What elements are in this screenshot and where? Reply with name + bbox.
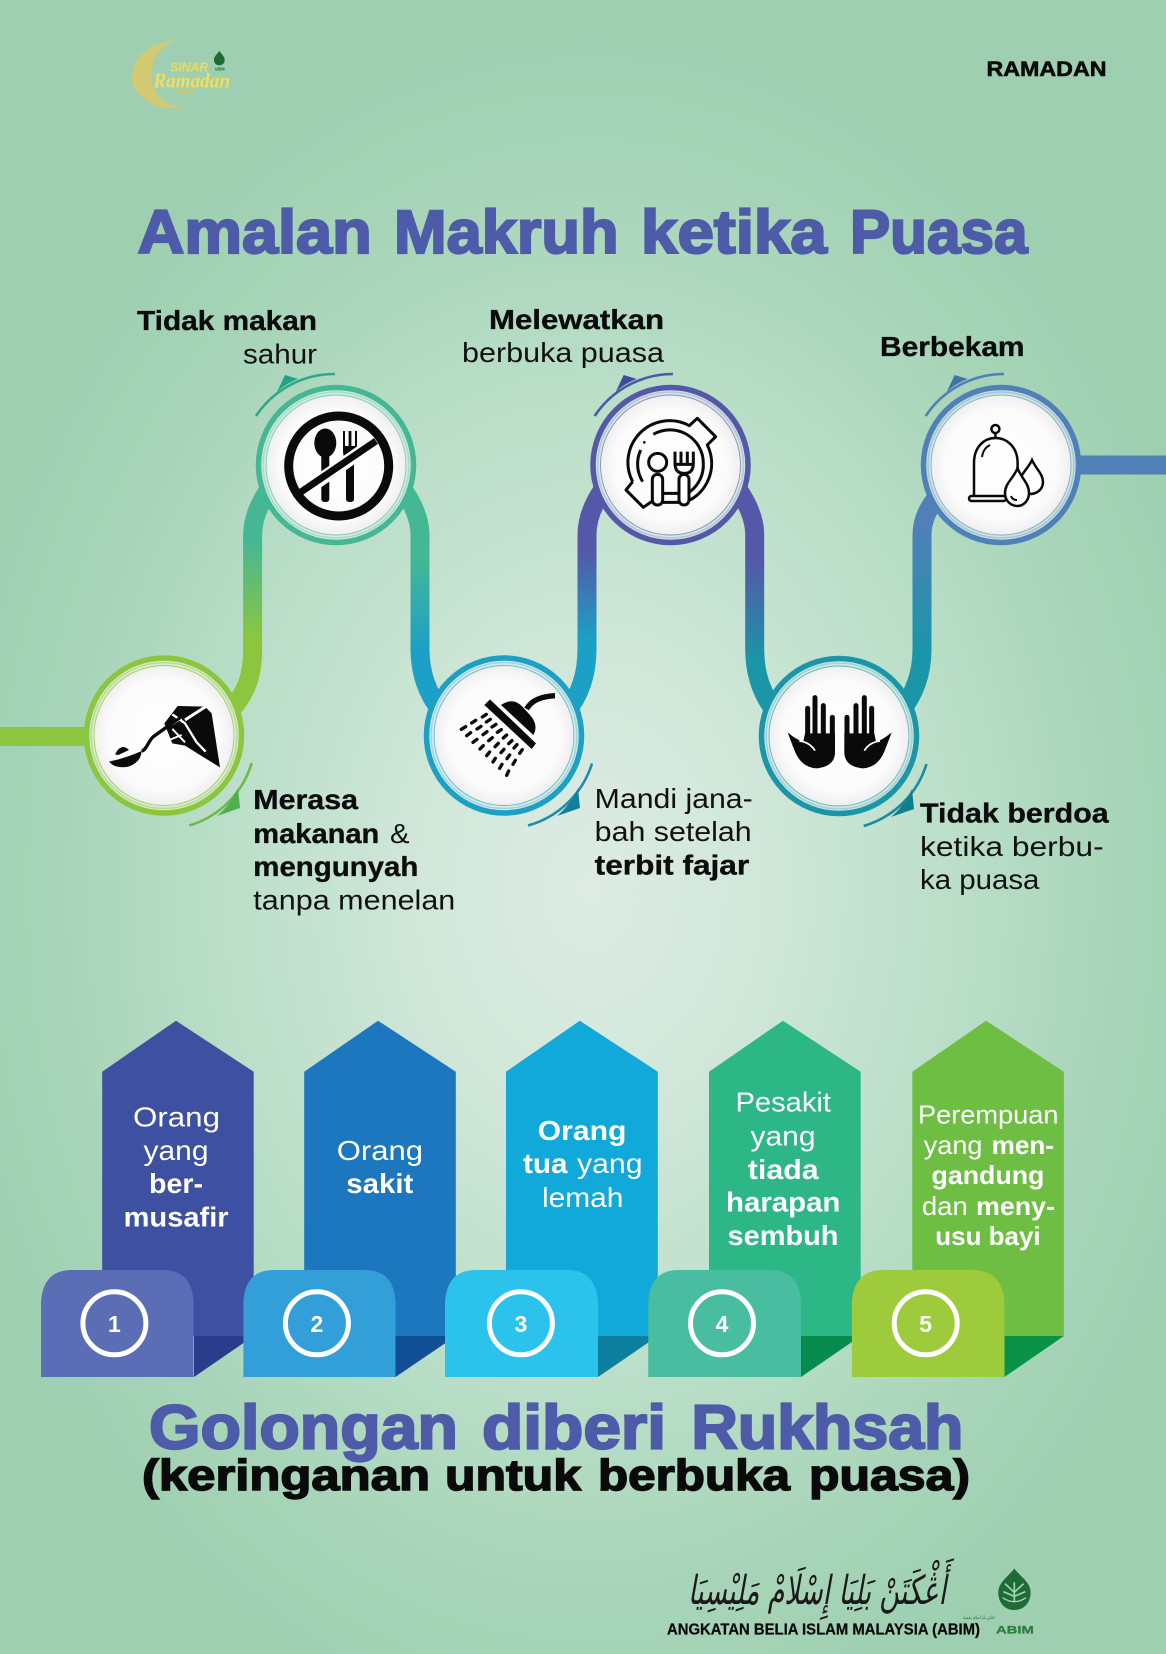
- icon: shower: [461, 696, 555, 775]
- pillar 4: Pesakit yang tiada harapan sembuh: tiada: [748, 1154, 819, 1185]
- pillar 2: Orang sakit: [243, 1021, 456, 1377]
- pillar 4: Pesakit yang tiada harapan sembuh: [648, 1021, 861, 1377]
- footer: ABIM wordmark: ANGKATAN BELIA ISLAM MALAYSIA (ABIM): [667, 1622, 980, 1638]
- pillar 4: Pesakit yang tiada harapan sembuh: yang: [750, 1121, 816, 1152]
- step 6: Berbekam: [924, 374, 1078, 542]
- heading: Golongan diberi Rukhsah: Golongan: [149, 1393, 458, 1462]
- label: Mandi janabah: [595, 783, 753, 880]
- pillar 3: Orang tua yang lemah: lemah: [542, 1182, 623, 1213]
- step 4: Melewatkan berbuka puasa: [593, 374, 748, 542]
- pillar 2: Orang sakit: sakit: [346, 1168, 413, 1199]
- step 2: Tidak makan sahur: [256, 374, 414, 542]
- label: Tidak makan sahur: Tidak makan: [137, 305, 317, 336]
- title: [138, 198, 1029, 266]
- pillar 1: Orang yang bermusafir: ber-: [149, 1168, 203, 1199]
- pillar 5: Perempuan mengandung dan menyusu bayi: Perempuan: [918, 1099, 1058, 1129]
- icon: praying hands: [788, 698, 892, 768]
- logo: Sinar Ramadan crescent: ABIM: [215, 66, 225, 71]
- title: Makruh: [394, 198, 619, 266]
- logo: Sinar Ramadan crescent: SINAR: [170, 60, 209, 75]
- title: Amalan: [138, 198, 372, 266]
- pillar 4: Pesakit yang tiada harapan sembuh: sembuh: [728, 1220, 838, 1251]
- pillar 5: Perempuan mengandung dan menyusu bayi: gandung: [932, 1160, 1044, 1190]
- heading: Golongan diberi Rukhsah: diberi: [482, 1393, 666, 1462]
- label: Tidak berdoa: Tidak berdoa: [920, 798, 1109, 829]
- pillar 3: Orang tua yang lemah: 3: [515, 1311, 527, 1337]
- pillar 1: Orang yang bermusafir: yang: [144, 1135, 208, 1166]
- pillar 2: Orang sakit: Orang: [337, 1135, 423, 1166]
- pillar 4: Pesakit yang tiada harapan sembuh: harapan: [726, 1187, 840, 1218]
- label: Tidak makan sahur: sahur: [243, 338, 317, 370]
- pillar 5: Perempuan mengandung dan menyusu bayi: dan: [922, 1191, 968, 1221]
- subheading: keringanan untuk berbuka puasa: berbuka: [598, 1451, 791, 1500]
- section tag: RAMADAN: RAMADAN: [986, 58, 1106, 81]
- logo: ABIM emblem: ABIM: [996, 1624, 1034, 1636]
- label: Melewatkan berbuka puasa: berbuka puasa: [462, 337, 664, 368]
- label: Tidak berdoa: [920, 798, 1109, 895]
- label: Melewatkan berbuka puasa: [462, 304, 664, 368]
- icon: plate with spoon and fork: [626, 418, 716, 507]
- heading: Golongan diberi Rukhsah: Rukhsah: [691, 1393, 963, 1462]
- label: Merasa makanan dan mengunyah: Merasa: [253, 784, 358, 815]
- pillar 4: Pesakit yang tiada harapan sembuh: 4: [716, 1311, 729, 1337]
- subheading: keringanan untuk berbuka puasa: puasa): [809, 1451, 970, 1500]
- logo: Sinar Ramadan crescent: Ramadan: [152, 70, 230, 92]
- label: Merasa makanan dan mengunyah: mengunyah: [253, 851, 418, 882]
- pillar 1: Orang yang bermusafir: musafir: [124, 1202, 229, 1233]
- label: Merasa makanan dan mengunyah: tanpa menelan: [253, 885, 455, 916]
- pillar 3: Orang tua yang lemah: yang: [577, 1148, 642, 1179]
- title: Puasa: [850, 198, 1029, 266]
- pillar 5: Perempuan mengandung dan menyusu bayi: usu bayi: [935, 1221, 1041, 1251]
- label: Merasa makanan dan mengunyah: &: [390, 818, 410, 849]
- label: Merasa makanan dan mengunyah: makanan: [253, 818, 379, 849]
- step 5: Tidak berdoa: [762, 658, 926, 826]
- pillar 5: Perempuan mengandung dan menyusu bayi: men-: [992, 1130, 1054, 1160]
- pillar 3: Orang tua yang lemah: tua: [523, 1148, 568, 1179]
- pillar 1: Orang yang bermusafir: [41, 1021, 254, 1377]
- pillar 5: Perempuan mengandung dan menyusu bayi: meny-: [976, 1191, 1055, 1221]
- logo: Sinar Ramadan crescent: 1444H: [173, 89, 194, 95]
- footer: ABIM wordmark: [667, 1558, 980, 1638]
- logo: ABIM emblem: اڠكتن بليا اسلام مليسيا: [963, 1615, 995, 1621]
- pillar 3: Orang tua yang lemah: Orang: [538, 1115, 626, 1146]
- heading: Golongan diberi Rukhsah: [149, 1393, 963, 1462]
- logo: ABIM emblem: [963, 1568, 1034, 1636]
- label: Mandi janabah: bah setelah: [595, 816, 752, 847]
- title: ketika: [641, 198, 828, 266]
- pillar 4: Pesakit yang tiada harapan sembuh: Pesakit: [736, 1087, 831, 1118]
- pillar 5: Perempuan mengandung dan menyusu bayi: [852, 1021, 1064, 1377]
- subheading: keringanan untuk berbuka puasa: untuk: [445, 1451, 582, 1500]
- pillar 5: Perempuan mengandung dan menyusu bayi: yang: [924, 1130, 982, 1160]
- step 1: Merasa makanan: [86, 658, 252, 826]
- icon: no eating: [289, 416, 389, 516]
- label: Mandi janabah: terbit fajar: [595, 850, 749, 880]
- pillar 5: Perempuan mengandung dan menyusu bayi: 5: [919, 1311, 932, 1337]
- label: Merasa makanan dan mengunyah: [253, 784, 455, 916]
- timeline path connectors: [0, 456, 1166, 746]
- step 3: Mandi janabah: [426, 658, 592, 826]
- icon: cupping cup and blood drops: [969, 425, 1043, 506]
- icon: hand tasting with spoon: [109, 706, 220, 767]
- footer: ABIM wordmark: أَڠْكَتَنْ بَلِيَا إِسْلَامْ مَلِيْسِيَا: [685, 1558, 954, 1621]
- label: Tidak makan sahur: [137, 305, 317, 370]
- subheading: keringanan untuk berbuka puasa: [142, 1451, 970, 1500]
- logo: Sinar Ramadan crescent: [132, 40, 230, 108]
- subheading: keringanan untuk berbuka puasa: (keringanan: [142, 1451, 430, 1500]
- label: Tidak berdoa: ka puasa: [920, 864, 1040, 895]
- pillar 3: Orang tua yang lemah: [445, 1021, 658, 1377]
- label: Berbekam: Berbekam: [880, 331, 1024, 362]
- label: Tidak berdoa: ketika berbu-: [920, 831, 1104, 862]
- pillar 1: Orang yang bermusafir: 1: [108, 1311, 121, 1337]
- pillar 1: Orang yang bermusafir: Orang: [133, 1102, 220, 1133]
- pillar 2: Orang sakit: 2: [311, 1311, 323, 1337]
- label: Mandi janabah: Mandi jana-: [595, 783, 753, 814]
- label: Melewatkan berbuka puasa: Melewatkan: [489, 304, 664, 335]
